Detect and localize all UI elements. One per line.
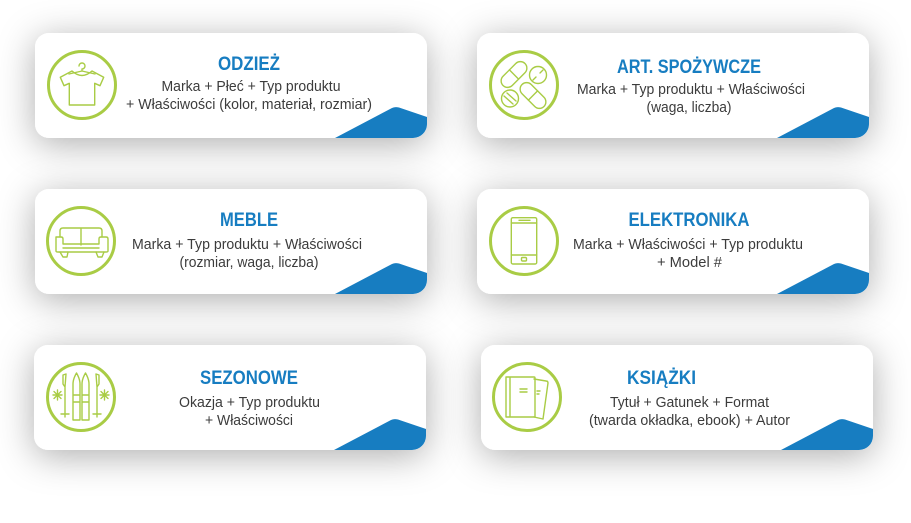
text block: (twarda okładka, ebook) + Autor (589, 413, 790, 429)
text block: Tytuł + Gatunek + Format (610, 395, 769, 411)
heading: KSIĄŻKI (627, 366, 696, 389)
text block: Marka + Typ produktu + Właściwości (577, 82, 805, 98)
icon: smartphone (490, 208, 558, 274)
text block (179, 395, 320, 429)
text block (126, 79, 372, 113)
text block: + Właściwości (205, 413, 293, 429)
text block: + Model # (657, 255, 722, 271)
blue corner (777, 107, 869, 138)
icon: t-shirt on hanger (48, 52, 116, 118)
panel: meble (35, 189, 427, 294)
text block: Okazja + Typ produktu (179, 395, 320, 411)
blue corner (335, 107, 427, 138)
panel: książki (481, 345, 873, 450)
text block (577, 82, 805, 116)
heading: MEBLE (220, 209, 278, 231)
heading: ART. SPOŻYWCZE (617, 55, 761, 78)
text block: (waga, liczba) (646, 100, 732, 116)
heading: ELEKTRONIKA (628, 209, 750, 231)
text block: Marka + Właściwości + Typ produktu (573, 237, 803, 253)
blue corner (777, 263, 869, 294)
text block: Marka + Typ produktu + Właściwości (132, 237, 362, 253)
panel: artykuły spożywcze (477, 33, 869, 138)
heading: ODZIEŻ (218, 52, 280, 75)
icon: sofa (48, 208, 114, 274)
icon: pills (490, 52, 558, 118)
text block (132, 237, 362, 271)
panel: sezonowe (34, 345, 426, 450)
blue corner (335, 263, 427, 294)
text block (589, 395, 790, 429)
icon: skis and snowflakes (48, 364, 114, 430)
blue corner (334, 419, 426, 450)
text block: (rozmiar, waga, liczba) (180, 255, 318, 271)
text block (573, 237, 803, 271)
icon: books (494, 364, 560, 430)
blue corner (781, 419, 873, 450)
panel: odzież (35, 33, 427, 138)
heading: SEZONOWE (200, 367, 298, 389)
panel: elektronika (477, 189, 869, 294)
text block: Marka + Płeć + Typ produktu (162, 79, 340, 95)
text block: + Właściwości (kolor, materiał, rozmiar) (126, 97, 372, 113)
